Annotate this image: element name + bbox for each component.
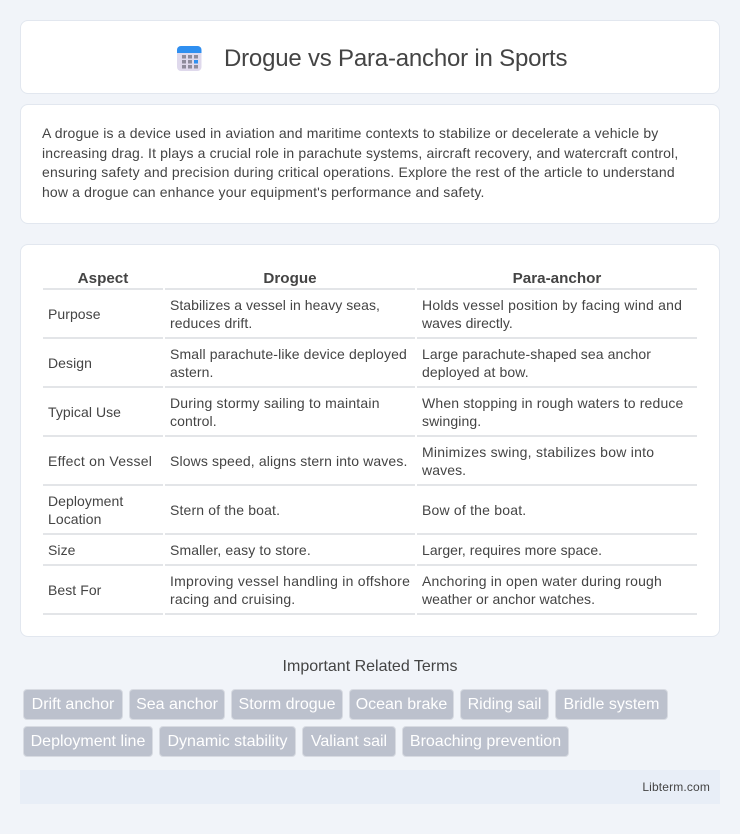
row: Effect on Vessel: Effect on Vessel	[48, 453, 152, 469]
header card	[20, 20, 720, 94]
intro paragraph: A drogue is a device used in aviation and maritime contexts to stabilize or decelerate a vehicle by	[42, 125, 658, 141]
row: Size: Size	[48, 542, 75, 558]
comparison table panel	[20, 244, 720, 637]
comparison table: deployed at bow.	[422, 364, 529, 380]
tag: Deployment line	[31, 733, 145, 750]
tag	[302, 726, 396, 757]
tag	[349, 689, 454, 720]
comparison table: Smaller, easy to store.	[170, 542, 311, 558]
icon: calendar	[177, 46, 202, 71]
row: Best For: Best For	[48, 582, 101, 598]
comparison table: racing and cruising.	[170, 591, 295, 607]
comparison table: astern.	[170, 364, 214, 380]
footer bar	[20, 770, 720, 804]
tag: Dynamic stability	[167, 733, 288, 750]
row: Typical Use: Typical Use	[48, 404, 121, 420]
table header: Drogue: Drogue	[263, 270, 317, 287]
row: Deployment Location: Location	[48, 511, 101, 527]
tag: Drift anchor	[32, 696, 114, 713]
comparison table: control.	[170, 413, 217, 429]
comparison table: waves.	[422, 462, 466, 478]
tag: Ocean brake	[356, 696, 447, 713]
tag	[159, 726, 296, 757]
comparison table: Stern of the boat.	[170, 502, 280, 518]
table header: Aspect: Aspect	[78, 270, 128, 287]
comparison table: Slows speed, aligns stern into waves.	[170, 453, 408, 469]
tag	[555, 689, 668, 720]
title: Drogue vs Para-anchor in Sports	[224, 45, 567, 72]
related terms heading: Important Related Terms	[283, 658, 457, 675]
comparison table: Improving vessel handling in offshore	[170, 573, 410, 589]
intro card	[20, 104, 720, 224]
comparison table: Small parachute-like device deployed	[170, 346, 407, 362]
comparison table: Anchoring in open water during rough	[422, 573, 662, 589]
comparison table: During stormy sailing to maintain	[170, 395, 380, 411]
tag: Storm drogue	[239, 696, 335, 713]
row: Purpose: Purpose	[48, 306, 101, 322]
tag	[231, 689, 343, 720]
comparison table: Stabilizes a vessel in heavy seas,	[170, 297, 380, 313]
row: Deployment Location: Deployment	[48, 493, 123, 509]
intro paragraph	[42, 125, 678, 200]
tag	[402, 726, 569, 757]
comparison table: Larger, requires more space.	[422, 542, 602, 558]
tag: Sea anchor	[136, 696, 218, 713]
row: Deployment Location	[48, 493, 124, 527]
comparison table: waves directly.	[422, 315, 513, 331]
tag	[460, 689, 549, 720]
tag: Broaching prevention	[410, 733, 561, 750]
tag	[23, 726, 153, 757]
comparison table: Minimizes swing, stabilizes bow into	[422, 444, 654, 460]
comparison table: Holds vessel position by facing wind and	[422, 297, 682, 313]
table header: Para-anchor: Para-anchor	[513, 270, 601, 287]
footer credit: Libterm.com	[642, 780, 710, 794]
comparison table: weather or anchor watches.	[422, 591, 595, 607]
intro paragraph: ensuring safety and precision during critical operations. Explore the rest of the article to understand	[42, 164, 675, 180]
tag	[23, 689, 123, 720]
tag: Bridle system	[563, 696, 660, 713]
comparison table: When stopping in rough waters to reduce	[422, 395, 684, 411]
row: Design: Design	[48, 355, 92, 371]
related terms tags	[23, 689, 668, 757]
comparison table	[43, 270, 697, 615]
tag	[129, 689, 225, 720]
comparison table: Large parachute-shaped sea anchor	[422, 346, 651, 362]
comparison table: swinging.	[422, 413, 481, 429]
intro paragraph: increasing drag. It plays a crucial role in parachute systems, aircraft recovery, and watercraft control,	[42, 144, 678, 160]
tag: Riding sail	[468, 696, 541, 713]
comparison table: Bow of the boat.	[422, 502, 526, 518]
intro paragraph: how a drogue can enhance your equipment's performance and safety.	[42, 184, 485, 200]
tag: Valiant sail	[311, 733, 387, 750]
comparison table: reduces drift.	[170, 315, 252, 331]
